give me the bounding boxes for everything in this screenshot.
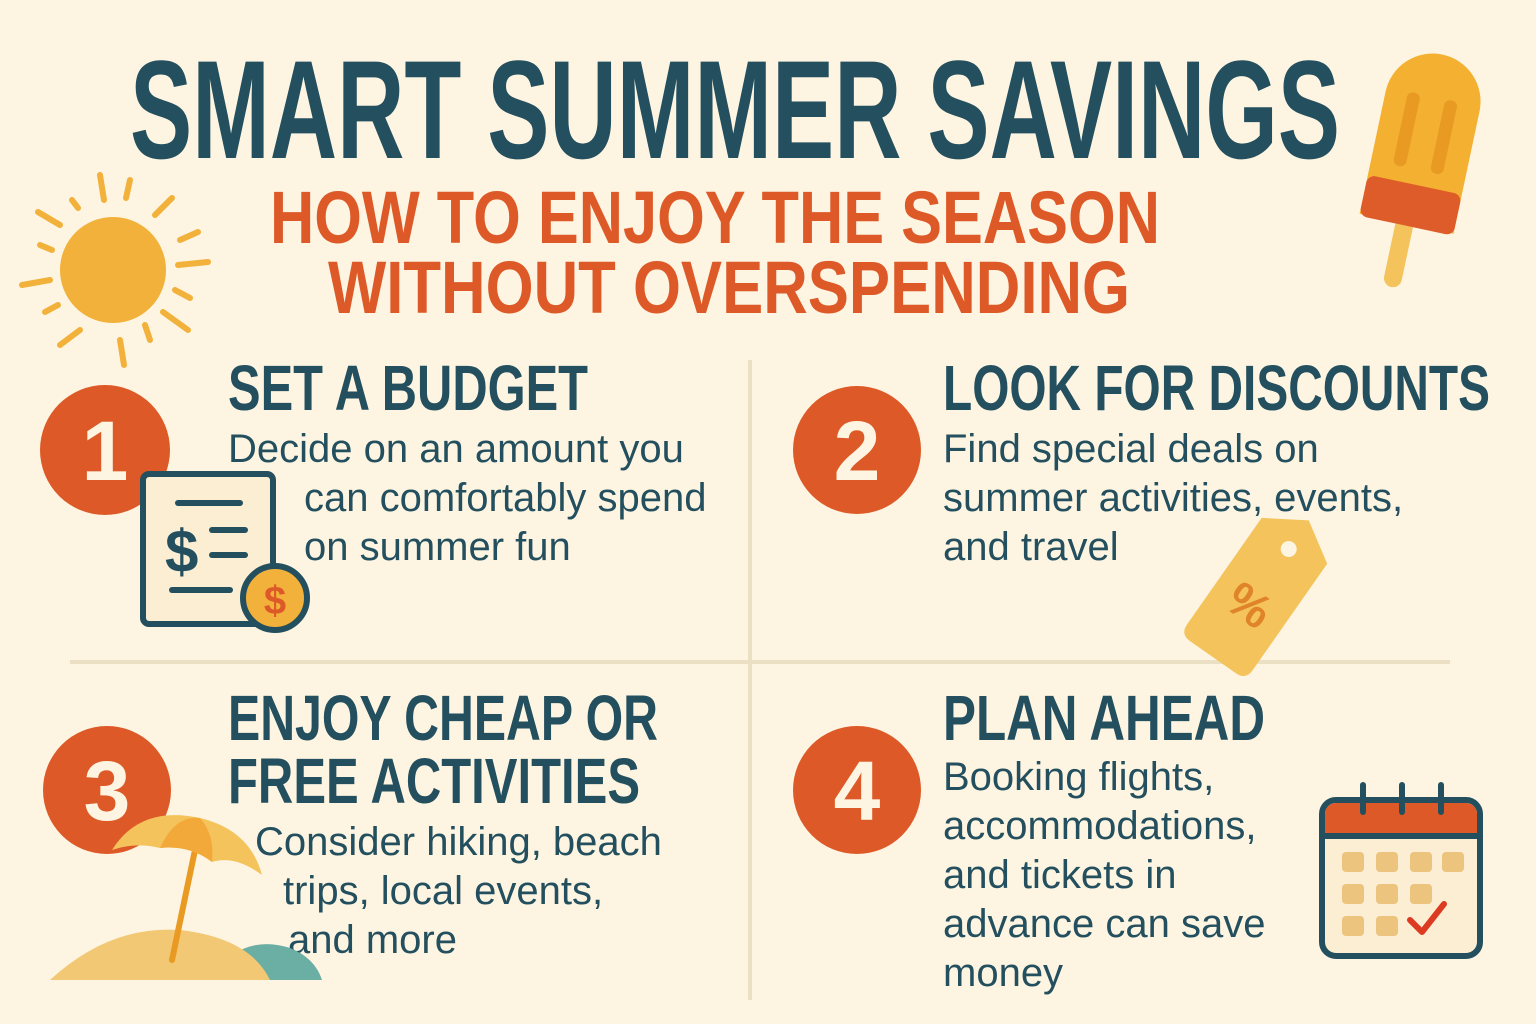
number badge 1: 1 (82, 404, 128, 498)
number badge 3: 3 (84, 744, 130, 838)
icon: discount tag: % (1216, 572, 1281, 640)
heading 1: SET A BUDGET (228, 352, 588, 424)
icon: budget document: $ (165, 518, 198, 585)
panel: look for discounts (793, 352, 1490, 680)
heading 4: PLAN AHEAD (943, 682, 1265, 754)
number badge 2: 2 (834, 404, 880, 498)
icon: budget document (143, 474, 307, 630)
body 4: Booking flights, (943, 755, 1214, 799)
body 4 (943, 755, 1265, 995)
subtitle: WITHOUT OVERSPENDING (328, 246, 1130, 329)
body 1 (228, 427, 706, 569)
body 4: accommodations, (943, 804, 1256, 848)
icon: budget document: $ (264, 579, 286, 623)
heading 3: FREE ACTIVITIES (228, 745, 640, 817)
body 2: and travel (943, 525, 1119, 569)
number badge 3 (43, 726, 171, 854)
body 1: Decide on an amount you (228, 427, 684, 471)
icon: beach umbrella (50, 815, 322, 980)
icon: calendar (1322, 785, 1480, 956)
body 4: advance can save (943, 902, 1265, 946)
body 3: trips, local events, (283, 869, 603, 913)
panel: set a budget (40, 352, 706, 630)
icon: popsicle (1346, 45, 1489, 297)
number badge 4 (793, 726, 921, 854)
body 4: and tickets in (943, 853, 1176, 897)
body 2: summer activities, events, (943, 476, 1403, 520)
number badge 4: 4 (834, 744, 881, 838)
subtitle (270, 176, 1160, 329)
heading 3: ENJOY CHEAP OR (228, 682, 658, 754)
icon: discount tag (1180, 497, 1342, 680)
icon: sun (22, 175, 208, 365)
number badge 2 (793, 386, 921, 514)
body 3: and more (288, 918, 457, 962)
body 3 (255, 820, 662, 962)
heading 3 (228, 682, 658, 817)
body 4: money (943, 951, 1063, 995)
panel: plan ahead (793, 682, 1480, 995)
body 2 (943, 427, 1403, 569)
number badge 1 (40, 385, 170, 515)
body 1: can comfortably spend (304, 476, 706, 520)
panel: cheap or free activities (43, 682, 662, 980)
body 3: Consider hiking, beach (255, 820, 662, 864)
subtitle: HOW TO ENJOY THE SEASON (270, 176, 1160, 259)
body 2: Find special deals on (943, 427, 1319, 471)
body 1: on summer fun (304, 525, 571, 569)
